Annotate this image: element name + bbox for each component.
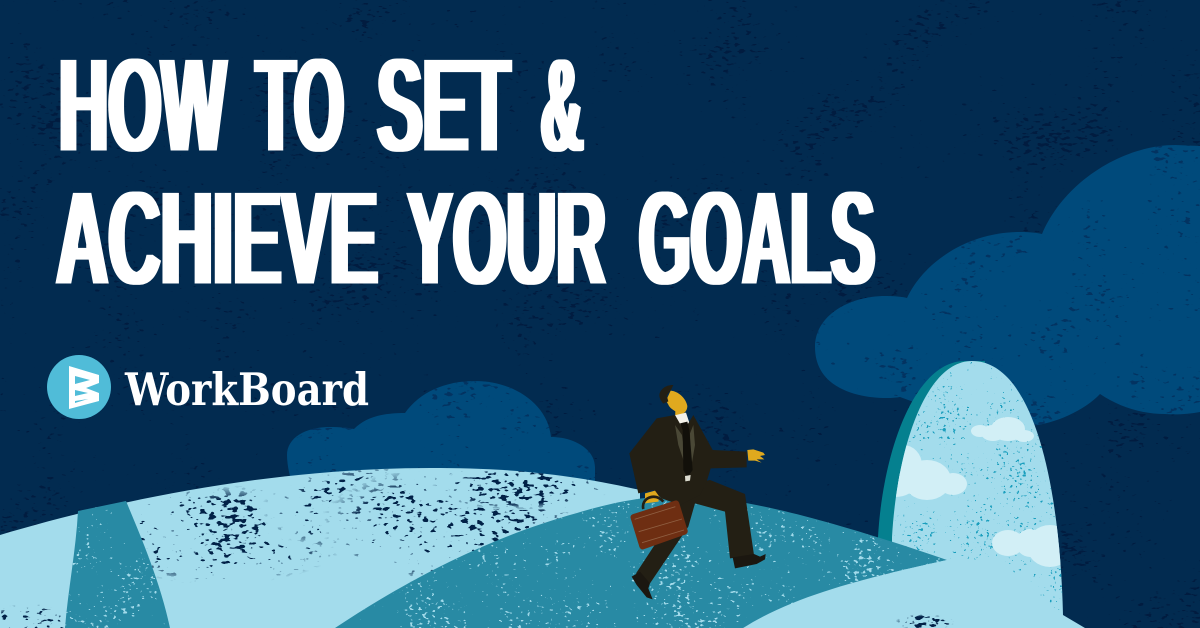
shirt tick [685, 475, 691, 481]
light blue front hill [740, 555, 1090, 628]
businessman walking with briefcase [629, 385, 766, 599]
light blue left hill [0, 460, 640, 628]
title line 1 [59, 29, 583, 181]
teal path on the far left [60, 500, 175, 628]
title line 1: SET [377, 29, 510, 181]
neck and face [666, 391, 687, 418]
cloud inside arch, lower right [992, 525, 1060, 567]
logo wordmark: WorkBoard [124, 363, 369, 416]
title line 2: ACHIEVE [56, 162, 378, 314]
cloud inside arch, top [971, 417, 1034, 442]
illustrated scene with title and logo: GOALS [639, 162, 875, 314]
archway, dark teal rim [878, 361, 985, 560]
title [56, 29, 875, 314]
title line 1: HOW [59, 29, 226, 181]
logo mark [47, 355, 111, 419]
WorkBoard logo [47, 355, 369, 419]
small cloud, behind hill [287, 381, 595, 481]
shirt collar [674, 413, 691, 432]
teal central hill [330, 490, 950, 628]
necktie [680, 422, 693, 477]
title line 2: YOUR [407, 162, 606, 314]
jacket [629, 415, 747, 505]
left hand [645, 491, 659, 503]
trousers [636, 480, 754, 583]
title line 1: TO [256, 29, 344, 181]
lapels [675, 425, 695, 472]
briefcase [630, 500, 688, 550]
rear shoe [632, 572, 653, 599]
right hand [747, 449, 765, 463]
title: & [541, 29, 583, 181]
briefcase handle [643, 497, 663, 509]
cloud inside arch, left [896, 445, 967, 500]
front shoe [733, 554, 766, 568]
hair [659, 385, 673, 404]
archway opening with sky [892, 361, 1063, 615]
large cloud, right [815, 145, 1200, 426]
